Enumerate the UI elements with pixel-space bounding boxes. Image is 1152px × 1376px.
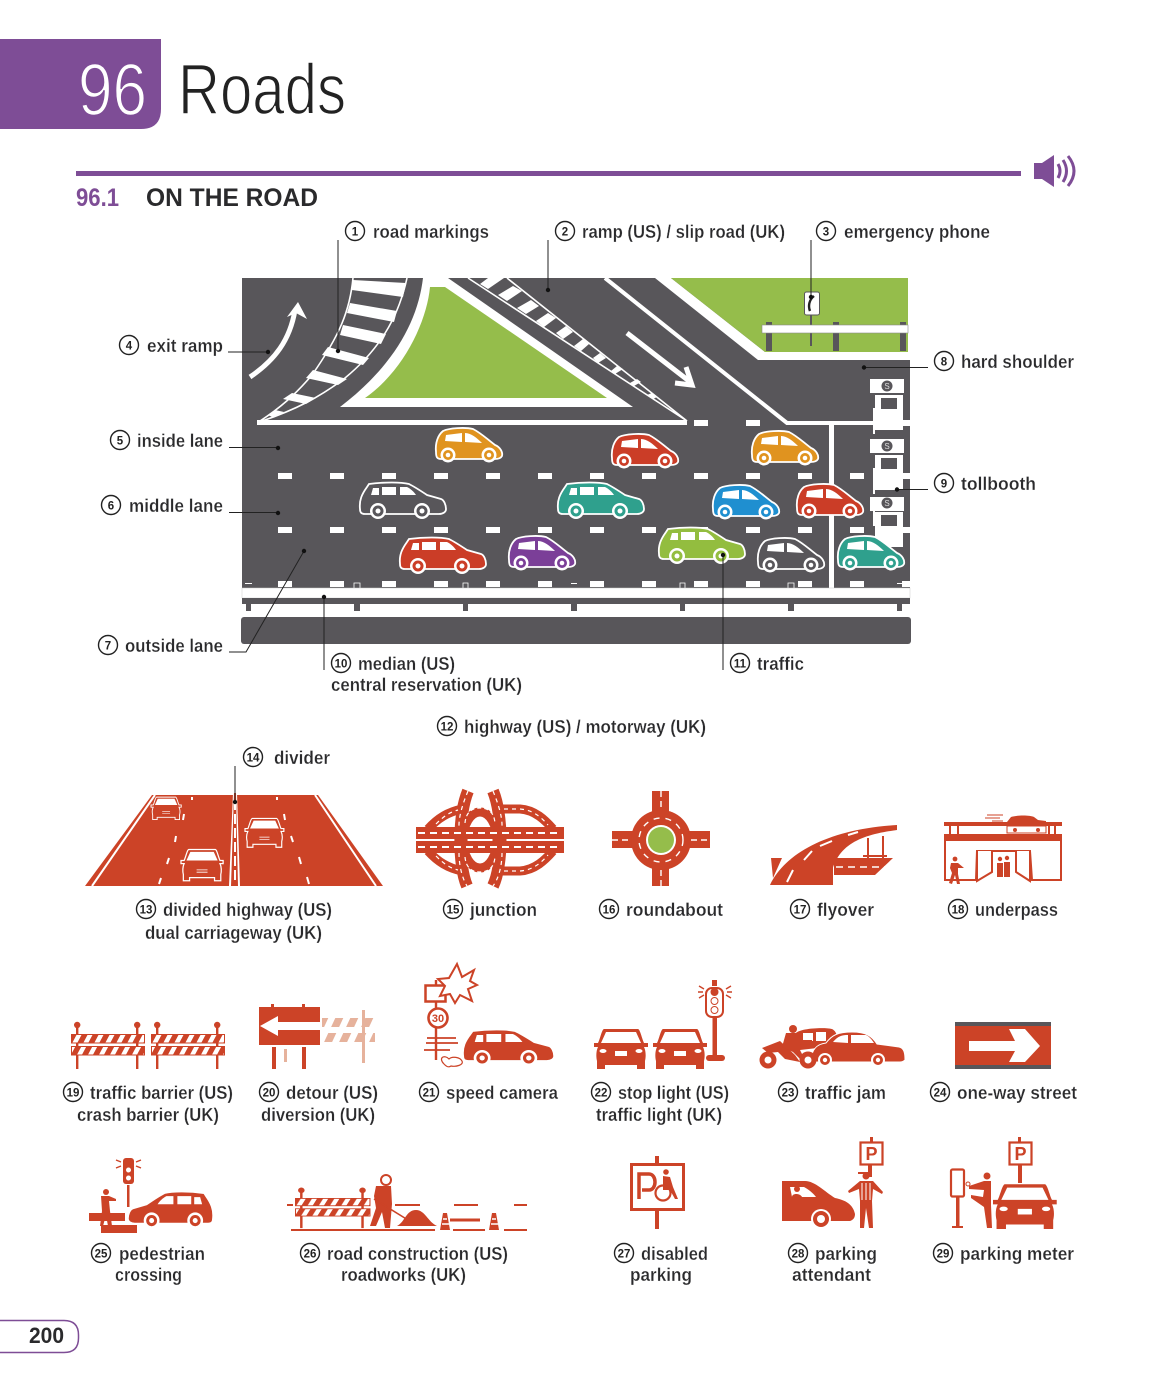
label 26: road construction (US) [327, 1244, 508, 1264]
section number: 96.1 [76, 184, 119, 212]
page number tab [0, 1320, 78, 1352]
label 8: hard shoulder: hard shoulder [961, 352, 1074, 372]
label 4: exit ramp [120, 336, 270, 356]
label 28: 28 [792, 1248, 805, 1260]
emergency phone [804, 292, 820, 346]
tollbooth 1 [870, 379, 904, 434]
label 27: 27 [618, 1248, 630, 1260]
median barrier [241, 588, 911, 644]
label 11: traffic [721, 553, 804, 674]
exit ramp hatching [260, 278, 407, 421]
icon 26: road construction [287, 1175, 527, 1230]
green verge top right [655, 278, 911, 360]
icon 29: parking meter: P [1014, 1144, 1027, 1164]
traffic island [340, 278, 633, 407]
label 6: middle lane: 6 [108, 500, 114, 512]
label 18 [948, 900, 1058, 920]
label 10: median: median (US) [358, 654, 455, 674]
label 6: middle lane: middle lane [129, 496, 223, 516]
tollbooth 3: S [884, 499, 890, 508]
straight arrow [627, 333, 692, 385]
section rule [76, 171, 1021, 176]
label 15 [444, 900, 537, 920]
label 25 [92, 1244, 205, 1285]
label 26 [300, 1244, 508, 1285]
label 9: tollbooth [895, 474, 1036, 494]
label 22 [592, 1082, 729, 1125]
label 16: 16 [603, 904, 615, 916]
road surface [242, 278, 910, 588]
label 1: road markings [336, 222, 489, 353]
label 13 [136, 900, 332, 943]
icon 23: traffic jam [760, 1025, 905, 1068]
label 16: roundabout [626, 900, 723, 920]
label 5: inside lane [110, 430, 280, 451]
label 21: 21 [423, 1088, 436, 1100]
icon 28: parking attendant [782, 1137, 883, 1229]
icon 18: underpass [944, 815, 1062, 884]
label 23: 23 [782, 1088, 794, 1100]
label 15: junction [469, 900, 537, 920]
label 22: 22 [595, 1088, 607, 1100]
label 29: 29 [937, 1248, 949, 1260]
label 7: outside lane [98, 549, 306, 656]
label 26: roadworks (UK) [341, 1265, 466, 1285]
label 11: traffic: traffic [757, 654, 804, 674]
icon 15: junction [416, 791, 564, 886]
label 5: inside lane: 5 [117, 436, 124, 448]
label 11: traffic: 11 [734, 658, 747, 670]
label 2: ramp: 2 [562, 226, 568, 238]
icon 20: detour sign [259, 1004, 375, 1069]
label 20: diversion (UK) [261, 1105, 375, 1125]
label 10: median [322, 595, 522, 695]
icon 24: one-way street [955, 1022, 1051, 1069]
label 25: crossing [115, 1265, 182, 1285]
label 19: 19 [67, 1088, 79, 1100]
label 4: exit ramp: 4 [126, 340, 133, 352]
icon 19: traffic barrier [72, 1022, 224, 1069]
label 3: emergency phone [809, 222, 990, 299]
page number tab: 200 [29, 1323, 64, 1348]
label 27 [614, 1244, 708, 1285]
label 28: parking [815, 1244, 877, 1264]
label 13: dual carriageway (UK) [145, 923, 322, 943]
icon 21: speed camera [424, 964, 554, 1067]
label 12: highway: 12 [441, 722, 453, 734]
curved arrow [250, 302, 307, 377]
label 17: 17 [794, 904, 806, 916]
lane dashes [245, 420, 910, 588]
label 19: traffic barrier (US) [90, 1083, 233, 1103]
icon 17: flyover [770, 825, 897, 885]
icon 22: stop light [594, 980, 732, 1069]
label 25: pedestrian [119, 1244, 205, 1264]
label 17: flyover [817, 900, 874, 920]
highway illustration [241, 278, 911, 644]
label 25: 25 [95, 1248, 108, 1260]
label 13: divided highway (US) [163, 900, 332, 920]
label 4: exit ramp: exit ramp [147, 336, 223, 356]
tollbooth 3 [870, 497, 904, 547]
label 26: 26 [304, 1248, 316, 1260]
toll lane line [829, 424, 834, 588]
icon 16: roundabout [612, 791, 710, 886]
label 18: 18 [952, 904, 965, 916]
icon 27: disabled parking [632, 1156, 684, 1229]
guard rail [762, 322, 908, 351]
traffic: cars [360, 428, 904, 574]
label 1: road markings: road markings [373, 222, 489, 242]
label 9: tollbooth: tollbooth [961, 474, 1036, 494]
icon 13: divided highway [85, 793, 383, 886]
ramp hatching [468, 278, 687, 421]
label 20: detour (US) [286, 1083, 378, 1103]
label 3: emergency phone: 3 [823, 226, 829, 238]
icon 21: speed camera: 30 [432, 1013, 444, 1025]
title: Roads [178, 51, 346, 130]
label 19 [64, 1082, 233, 1125]
label 19: crash barrier (UK) [77, 1105, 219, 1125]
label 17 [790, 900, 874, 920]
label 27: parking [630, 1265, 692, 1285]
tollbooth 2 [870, 439, 904, 494]
label 7: outside lane: 7 [105, 640, 111, 652]
icon: audio speaker [1034, 155, 1074, 187]
label 22: traffic light (UK) [596, 1105, 722, 1125]
label 8: hard shoulder [862, 352, 1074, 372]
label 5: inside lane: inside lane [137, 431, 223, 451]
label 24: one-way street [957, 1083, 1077, 1103]
tollbooth 2: S [884, 442, 890, 451]
label 12: highway: highway (US) / motorway (UK) [464, 717, 706, 737]
label 27: disabled [641, 1244, 708, 1264]
tollbooth 1: S [884, 382, 890, 391]
label 24: 24 [934, 1088, 947, 1100]
label 14: divider: 14 [247, 752, 260, 764]
label 22: stop light (US) [618, 1083, 729, 1103]
header: chapter tab [0, 39, 161, 131]
label 2: ramp [546, 222, 785, 292]
label 10: median: central reservation (UK) [331, 675, 522, 695]
label 21: speed camera [446, 1083, 559, 1103]
label 20: 20 [263, 1088, 275, 1100]
label 18: underpass [975, 900, 1058, 920]
label 3: emergency phone: emergency phone [844, 222, 990, 242]
label 29: parking meter [960, 1244, 1074, 1264]
label 8: hard shoulder: 8 [941, 356, 948, 368]
label 2: ramp: ramp (US) / slip road (UK) [582, 222, 785, 242]
label 9: tollbooth: 9 [941, 478, 947, 490]
label 1: road markings: 1 [352, 226, 359, 238]
label 15: 15 [447, 904, 460, 916]
label 13: 13 [140, 904, 152, 916]
label 23: traffic jam [805, 1083, 886, 1103]
label 14: divider [233, 748, 330, 804]
ramp lane lines [257, 278, 874, 425]
label 7: outside lane: outside lane [125, 636, 223, 656]
label 6: middle lane [102, 496, 280, 516]
label 28: attendant [792, 1265, 871, 1285]
header: chapter tab: 96 [78, 50, 147, 131]
label 28 [788, 1244, 877, 1285]
label 10: median: 10 [335, 658, 347, 670]
icon 25: pedestrian crossing [89, 1158, 213, 1233]
icon 29: parking meter [951, 1137, 1057, 1229]
label 20 [260, 1082, 378, 1125]
label 14: divider: divider [274, 748, 330, 768]
section heading: ON THE ROAD [146, 184, 318, 212]
icon 28: parking attendant: P [865, 1144, 878, 1164]
